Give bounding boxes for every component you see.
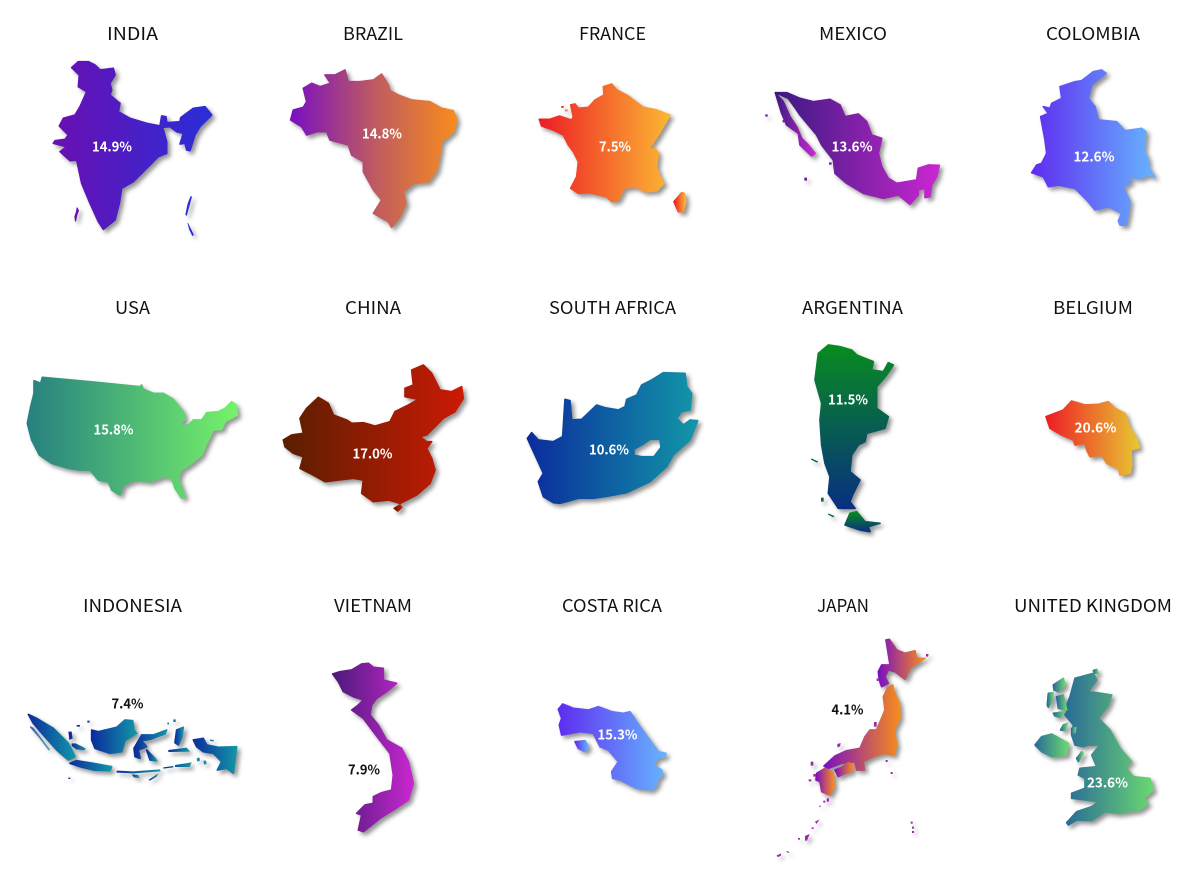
- label: Mexico value: 13.6%: [832, 136, 872, 156]
- map: USA: [27, 377, 237, 498]
- map: Colombia: [1032, 70, 1155, 225]
- map: Costa Rica: [558, 704, 666, 790]
- panel: Vietnam: [333, 593, 413, 832]
- label: United Kingdom value: 23.6%: [1087, 772, 1128, 792]
- map: China: [283, 365, 463, 511]
- label: Indonesia value: 7.4%: [112, 692, 144, 712]
- heading: USA: USA: [115, 295, 150, 320]
- map: France: [539, 84, 686, 212]
- label: Argentina value: 11.5%: [828, 388, 868, 408]
- label: Japan value: 4.1%: [832, 698, 864, 718]
- panel: India: [53, 21, 212, 236]
- panel: Mexico: [765, 21, 939, 204]
- panel: Colombia: [1032, 21, 1155, 225]
- heading: Colombia: COLOMBIA: [1046, 21, 1140, 46]
- panel: China: [283, 295, 463, 511]
- panel: Brazil: [291, 21, 457, 227]
- label: South Africa value: 10.6%: [589, 438, 629, 458]
- label: Belgium value: 20.6%: [1074, 416, 1116, 436]
- heading: Brazil: BRAZIL: [343, 21, 403, 46]
- map: Brazil: [291, 70, 457, 227]
- map: South Africa: [527, 373, 698, 503]
- heading: South Africa: SOUTH AFRICA: [549, 295, 676, 320]
- map: United Kingdom: [1035, 669, 1153, 825]
- label: Vietnam value: 7.9%: [348, 758, 380, 778]
- panel: USA: [27, 295, 237, 498]
- heading: Indonesia: INDONESIA: [83, 593, 182, 618]
- label: USA value: 15.8%: [94, 418, 134, 438]
- label: Colombia value: 12.6%: [1074, 146, 1114, 166]
- heading: Belgium: BELGIUM: [1053, 295, 1133, 320]
- panel: Indonesia: [28, 593, 237, 781]
- label: Brazil value: 14.8%: [362, 122, 402, 142]
- panel: South Africa: [527, 295, 698, 503]
- panel: United Kingdom: [1014, 593, 1172, 825]
- panel: Belgium: [1046, 295, 1139, 475]
- label: China value: 17.0%: [352, 442, 392, 462]
- map: Vietnam: [333, 663, 413, 832]
- heading: Mexico: MEXICO: [819, 21, 887, 46]
- map: Japan: [777, 639, 929, 857]
- label: Costa Rica value: 15.3%: [598, 724, 638, 744]
- map: Indonesia: [28, 714, 237, 781]
- heading: Costa Rica: COSTA RICA: [562, 593, 662, 618]
- heading: United Kingdom: UNITED KINGDOM: [1014, 593, 1172, 618]
- map: Argentina: [811, 345, 893, 532]
- heading: Vietnam: VIETNAM: [334, 593, 412, 618]
- map: Belgium: [1046, 401, 1139, 475]
- panel: Costa Rica: [558, 593, 666, 790]
- heading: India: INDIA: [107, 21, 158, 46]
- label: France value: 7.5%: [599, 136, 631, 156]
- panel: Argentina: [802, 295, 903, 532]
- heading: France: FRANCE: [579, 21, 646, 46]
- heading: China: CHINA: [345, 295, 401, 320]
- panel: Japan: [777, 593, 929, 857]
- label: India value: 14.9%: [92, 136, 132, 156]
- heading: Argentina: ARGENTINA: [802, 295, 903, 320]
- map: Mexico: [765, 93, 939, 204]
- heading: Japan: JAPAN: [817, 593, 869, 618]
- panel: France: [539, 21, 686, 212]
- map: India: [53, 62, 212, 236]
